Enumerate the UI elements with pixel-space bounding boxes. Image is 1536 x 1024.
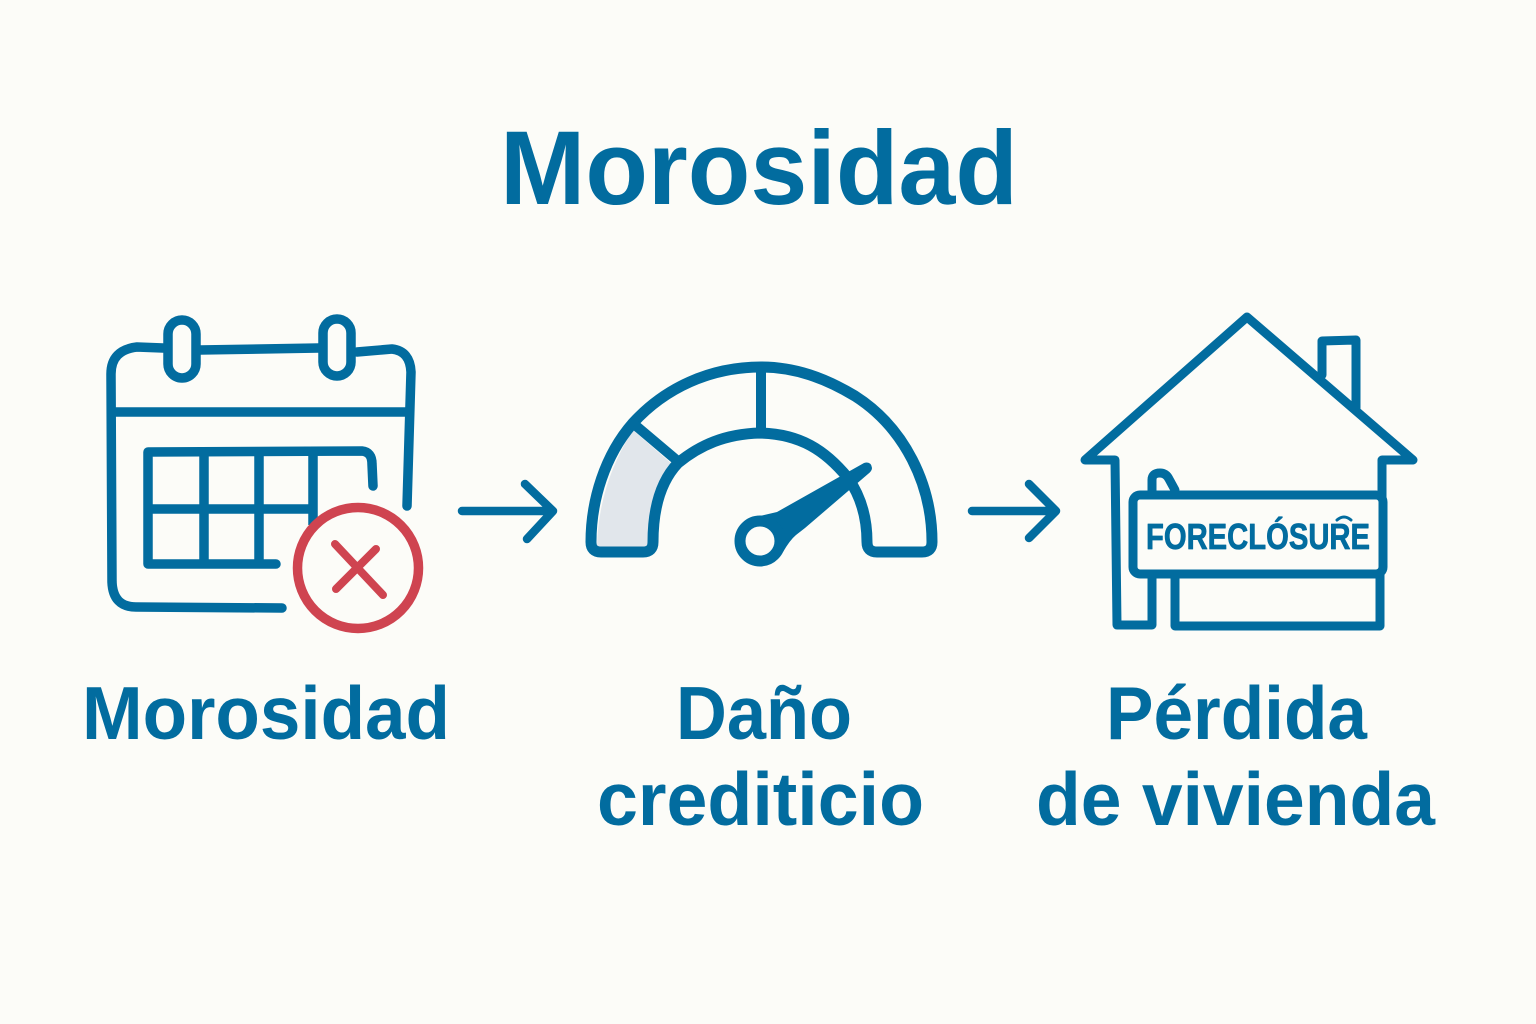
label: daño crediticio: Daño <box>676 671 852 755</box>
icon: red circle with cross <box>298 508 418 628</box>
label: pérdida de vivienda: Pérdida <box>1106 671 1368 755</box>
arrow: credit damage to home loss <box>972 484 1056 538</box>
foreclosure sign <box>1133 495 1383 574</box>
label: daño crediticio <box>597 671 924 841</box>
arrow: morosidad to credit damage <box>462 484 553 539</box>
label: pérdida de vivienda <box>1036 671 1436 841</box>
gauge shaded segment <box>597 430 673 548</box>
foreclosure sign: FORECLÓSURE <box>1146 515 1370 557</box>
icon: credit score gauge <box>591 367 932 561</box>
title: Morosidad <box>500 110 1018 227</box>
label: pérdida de vivienda: de vivienda <box>1036 757 1436 841</box>
label: morosidad: Morosidad <box>82 671 450 755</box>
icon: calendar with missed payment <box>111 319 418 628</box>
gauge needle <box>740 463 872 561</box>
label: daño crediticio: crediticio <box>597 757 924 841</box>
icon: house with foreclosure sign <box>1085 317 1413 626</box>
